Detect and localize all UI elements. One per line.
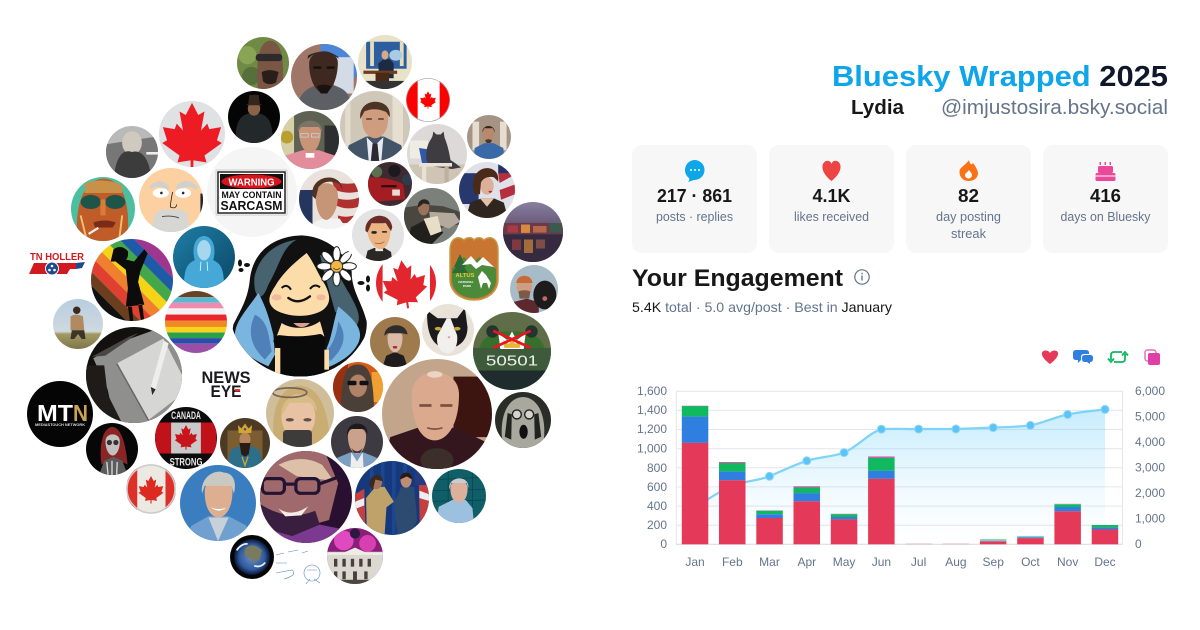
avatar: orange man with green glasses [71, 177, 135, 241]
right axis labels: 0 [1135, 537, 1142, 551]
user name: Lydia [851, 97, 905, 119]
left axis labels [637, 384, 667, 551]
avatar: MTN logo [27, 381, 93, 447]
avatar: teal wall man [432, 469, 486, 523]
avatar: pride flag [165, 291, 227, 353]
bar: Mar [756, 510, 783, 544]
avatar: red illustration collage [368, 162, 413, 206]
stat label: day posting [936, 209, 1001, 224]
month labels: Feb [722, 555, 743, 569]
avatar: canada flag button [126, 464, 176, 514]
logo: Alt US national park badge [450, 238, 498, 300]
icon: heart [822, 161, 841, 181]
avatar: man in blue blazer [331, 416, 383, 468]
avatar: progress rainbow silhouette [91, 239, 173, 321]
avatar: Canada Strong [155, 407, 217, 469]
avatar: scream painting [495, 392, 551, 448]
avatar: flame hooded man [333, 362, 383, 412]
month labels: Dec [1094, 555, 1116, 569]
logo: News Eye: NEWS [202, 368, 250, 387]
left axis labels: 200 [647, 518, 667, 532]
avatar: man with flag backdrop [299, 169, 359, 229]
logo: Alt US national park badge: NATIONAL [458, 280, 474, 284]
logo: Canada grunge flag [376, 256, 436, 308]
avatar: woman in black hat [370, 317, 420, 367]
avatar: main profile cartoon girl [232, 235, 367, 376]
left axis labels: 0 [660, 537, 667, 551]
logo: TN Holler [29, 251, 85, 275]
bar: Apr [794, 486, 820, 544]
avatar: bearded man with purple tones [260, 451, 352, 543]
right axis labels: 2,000 [1135, 486, 1165, 500]
bar: Dec [1092, 525, 1118, 544]
avatar: MTN logo: MEDIASTOUCH NETWORK [35, 423, 86, 427]
month labels: May [833, 555, 855, 569]
avatar: warning sarcasm sign [207, 147, 297, 237]
month labels: Jan [685, 555, 705, 569]
avatar: canada flag small [406, 78, 450, 122]
avatar: red hair illustration [86, 423, 138, 475]
avatar: frog 50501: 50501 [486, 353, 538, 369]
left axis labels: 1,600 [637, 384, 667, 398]
logo: Alt US national park badge: PARK [463, 284, 472, 288]
avatar: blue background man [180, 465, 256, 541]
avatar: white house purple fireworks [327, 528, 383, 584]
cumulative line [695, 409, 1105, 507]
month labels [685, 555, 1116, 569]
right axis labels [1135, 384, 1165, 551]
avatar: man in pink shirt [280, 111, 339, 169]
avatar: man in field [53, 299, 103, 349]
logo: News Eye: EYE [210, 382, 242, 401]
panel: day posting streak [906, 145, 1031, 253]
right axis labels: 6,000 [1135, 384, 1165, 398]
avatar: bald man in dark shirt [382, 359, 492, 472]
left axis labels: 1,400 [637, 403, 667, 417]
avatar: kamala handshake with flags [355, 461, 429, 535]
avatar: suit man [340, 91, 410, 161]
left axis labels: 600 [647, 480, 667, 494]
chart: monthly engagement [637, 384, 1165, 569]
month labels: Oct [1021, 555, 1040, 569]
avatar: sunglasses man [237, 37, 289, 89]
avatar: Canada Strong: STRONG [170, 456, 202, 468]
right axis labels: 4,000 [1135, 435, 1165, 449]
month labels: Mar [759, 555, 780, 569]
month labels: Aug [945, 555, 967, 569]
stat value: 217 · 861 [657, 186, 732, 206]
icon: sparkle right of avatar [358, 276, 370, 292]
avatar: cartoon old man [139, 168, 203, 232]
avatar: man with hoodie [291, 44, 357, 110]
icon: likes [1042, 350, 1058, 364]
avatar: canada leaf grey [159, 101, 225, 169]
right axis labels: 1,000 [1135, 512, 1165, 526]
stat label: streak [951, 226, 986, 241]
logo: News Eye [202, 368, 250, 401]
stat label [936, 209, 1001, 241]
icon: cake [1096, 162, 1116, 181]
avatar: warning sarcasm sign: WARNING [228, 178, 275, 188]
avatar: warning sarcasm sign: MAY CONTAIN [222, 190, 282, 200]
line markers [766, 405, 1109, 480]
month labels: Jun [872, 555, 891, 569]
stat value: 82 [958, 186, 979, 206]
month labels: Sep [983, 555, 1004, 569]
bar: Jun [868, 456, 895, 544]
panel: posts and replies [632, 145, 757, 253]
engagement summary: 5.4K total · 5.0 avg/post · Best in January [632, 299, 892, 315]
avatar: man with black dog [510, 265, 558, 313]
left axis labels: 1,200 [637, 422, 667, 436]
heading: your engagement: Your Engagement [632, 265, 843, 292]
avatar: MTN logo: MT [37, 400, 73, 426]
month labels: Nov [1057, 555, 1078, 569]
chart legend [1042, 350, 1160, 365]
right axis labels: 3,000 [1135, 460, 1165, 474]
avatar: press briefing room [358, 35, 412, 92]
icon: quotes [1145, 350, 1160, 365]
avatar: woman with american flag [459, 162, 515, 218]
left axis labels: 400 [647, 499, 667, 513]
avatar: blonde woman with phone [266, 379, 334, 450]
avatar: frog 50501 [473, 312, 551, 390]
avatar: black and white woman [106, 126, 158, 178]
bar: Oct [1017, 536, 1044, 544]
avatar: hand drawn sketch [276, 550, 320, 584]
avatar: blue hoodie figure [173, 226, 235, 288]
avatar: warning sarcasm sign: SARCASM [220, 199, 282, 213]
bar: Aug [943, 542, 969, 545]
bar: Feb [719, 462, 746, 544]
left axis labels: 1,000 [637, 442, 667, 456]
avatar: Canada Strong: CANADA [171, 410, 201, 422]
icon: flame [960, 160, 978, 181]
avatar: 3d cartoon boy [352, 209, 404, 261]
avatar: earth [230, 535, 274, 579]
stat value: 4.1K [812, 186, 850, 206]
stat label: days on Bluesky [1060, 209, 1151, 224]
icon: info [855, 270, 869, 284]
avatar: black hat man [228, 91, 280, 143]
avatar cluster [27, 35, 563, 584]
month labels: Apr [797, 555, 816, 569]
panel: days on Bluesky [1043, 145, 1168, 253]
stat label: likes received [794, 209, 869, 224]
stat value: 416 [1090, 186, 1121, 206]
avatar: MTN logo: N [73, 400, 88, 426]
month labels: Jul [911, 555, 926, 569]
title: Bluesky Wrapped 2025 [832, 61, 1168, 93]
icon: sparkle left of avatar [238, 260, 250, 272]
user handle: @imjustosira.bsky.social [941, 97, 1168, 119]
avatar: notebook and pen [86, 327, 182, 423]
avatar: tuxedo cat [422, 304, 474, 356]
left axis labels: 800 [647, 461, 667, 475]
logo: Alt US national park badge: ALTUS [456, 273, 475, 279]
avatar: reclining man [404, 188, 460, 244]
logo: TN Holler: TN HOLLER [30, 251, 84, 263]
bar: Jan [682, 406, 708, 544]
avatar: harbor town at dusk [503, 202, 563, 262]
panel: likes received [769, 145, 894, 253]
right axis labels: 5,000 [1135, 410, 1165, 424]
avatar: bearded king [220, 418, 270, 468]
icon: replies [1073, 350, 1093, 364]
bar: Jul [905, 542, 932, 545]
avatar: man in plaid shirt [467, 115, 511, 159]
stat label: posts · replies [656, 209, 733, 224]
bar: Nov [1054, 504, 1081, 544]
bar: May [831, 514, 857, 544]
bar: Sep [980, 539, 1006, 544]
avatar: grey cat on chair [407, 124, 467, 186]
icon: reposts [1108, 352, 1128, 362]
cumulative area [695, 409, 1105, 544]
icon: speech bubble [685, 160, 705, 182]
